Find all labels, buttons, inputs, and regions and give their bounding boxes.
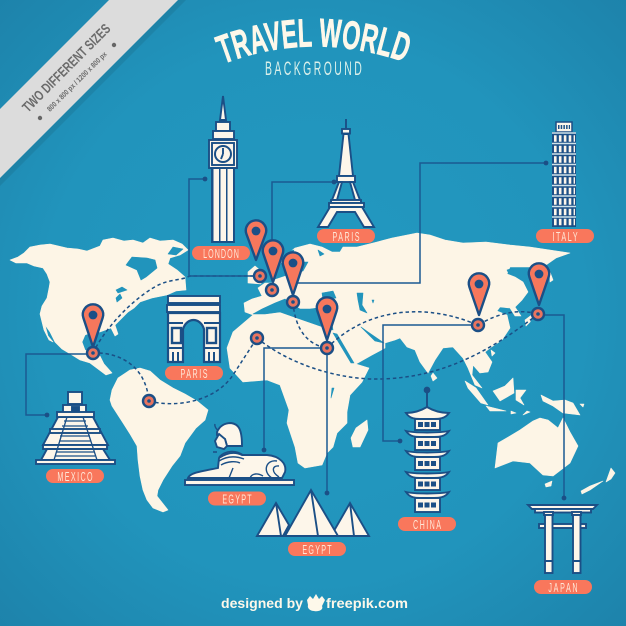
indonesia and philippines [431,272,553,415]
footer credit [221,594,408,611]
subtitle: BACKGROUND [265,59,362,80]
pin: japan [529,263,549,305]
ribbon sizes: 800 x 800 px / 1200 x 800 px [45,49,109,113]
label: london: LONDON [203,248,239,262]
landmark: arc de triomphe [167,296,220,362]
label: paris (arch) [165,366,223,382]
title: TRAVEL WORLD [214,18,410,62]
connector dots [45,161,566,500]
landmark: pisa tower [552,122,576,227]
label: paris (eiffel): PARIS [333,231,359,245]
label: italy [536,229,594,245]
pin: china [469,273,489,315]
landmark: mexican pyramid [36,392,115,464]
new guinea [541,395,584,415]
label: japan [534,580,592,596]
pin: egypt [317,297,337,340]
inland seas [116,247,514,398]
label: london [192,246,250,262]
label: paris (eiffel) [317,229,375,245]
label: egypt (sphinx) [208,492,266,507]
label: egypt (sphinx): EGYPT [222,494,252,507]
label: mexico: MEXICO [57,471,93,485]
label: egypt (pyramids) [288,542,346,558]
label: paris (arch): PARIS [181,368,207,382]
world map [10,233,615,512]
label: italy: ITALY [552,231,578,245]
pin: paris [263,240,283,282]
map pins [83,220,549,347]
label: mexico [46,469,104,485]
label: egypt (pyramids): EGYPT [302,544,332,558]
footer credit: freepik.com [326,596,408,611]
landmark: big ben [209,96,237,242]
south america [110,368,208,512]
marker centres [91,274,540,403]
eurasia and africa [227,233,570,468]
corner ribbon [0,0,186,186]
pin: mexico [83,304,103,347]
pin: italy [283,252,303,295]
madagascar [351,420,368,447]
tasmania and new zealand [545,468,615,494]
label: china [398,517,456,533]
landmark: sphinx [185,423,294,485]
location markers [87,270,544,407]
connector lines [26,163,564,498]
landmark: eiffel tower [318,119,374,227]
pin: london [246,220,266,260]
label: japan: JAPAN [548,582,578,596]
flight routes [93,276,538,404]
landmark: pagoda [406,388,449,512]
label: china: CHINA [413,519,441,533]
australia [495,418,578,476]
icon: freepik logo [307,594,325,611]
north america [10,238,188,375]
footer credit: designed by [221,596,304,611]
landmark: pyramids [257,490,369,536]
landmark: torii gate [528,505,597,573]
